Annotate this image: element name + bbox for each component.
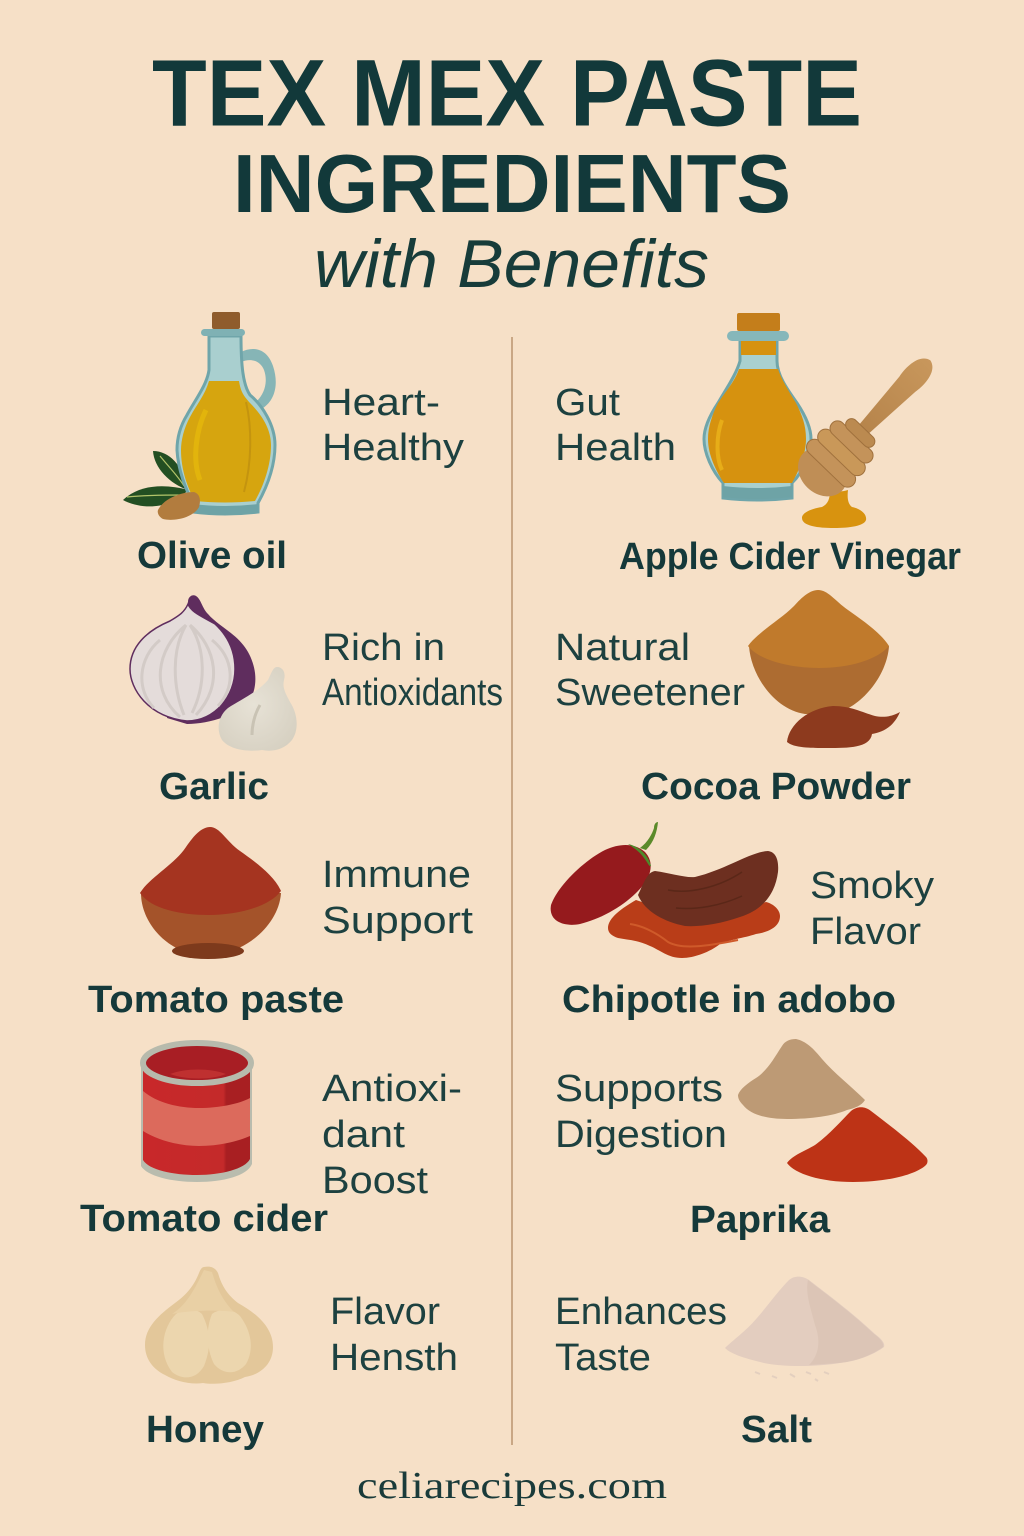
benefit: Hensth <box>330 1337 458 1379</box>
benefit <box>555 382 676 469</box>
item: chipotle in adobo <box>551 822 934 1021</box>
benefit: Taste <box>555 1337 651 1379</box>
label: Tomato cider <box>80 1198 328 1240</box>
benefit: Immune <box>322 854 471 896</box>
benefit <box>555 627 745 714</box>
label: Tomato paste <box>88 979 344 1021</box>
benefit: Digestion <box>555 1114 727 1156</box>
benefit: Natural <box>555 627 690 669</box>
icon: chipotle peppers in sauce <box>551 822 780 958</box>
icon: pale garlic bulb <box>145 1267 273 1384</box>
label: Olive oil <box>137 535 287 577</box>
item: salt <box>555 1277 884 1451</box>
label: Honey <box>146 1409 264 1451</box>
benefit: Smoky <box>810 865 934 907</box>
benefit: Flavor <box>810 911 921 953</box>
label: Garlic <box>159 766 269 808</box>
icon: bowl of cocoa and chili <box>748 590 900 748</box>
label: Apple Cider Vinegar <box>619 536 961 578</box>
benefit <box>322 1068 462 1202</box>
item: tomato paste <box>88 827 474 1021</box>
benefit <box>555 1068 727 1156</box>
benefit: Boost <box>322 1160 428 1202</box>
label: Cocoa Powder <box>641 766 911 808</box>
benefit: Sweetener <box>555 672 745 714</box>
icon: onion and garlic <box>130 595 297 751</box>
item: honey <box>145 1267 458 1451</box>
benefit <box>555 1291 727 1379</box>
center divider <box>511 337 513 1445</box>
benefit: Gut <box>555 382 620 424</box>
benefit: Healthy <box>322 427 464 469</box>
item: apple cider vinegar <box>555 313 961 578</box>
item: cocoa powder <box>555 590 911 808</box>
benefit <box>810 865 934 953</box>
title: with Benefits <box>314 226 709 302</box>
benefit: Flavor <box>330 1291 440 1333</box>
benefit <box>330 1291 458 1379</box>
icon: salt pile <box>725 1277 884 1381</box>
benefit: Support <box>322 900 474 942</box>
item: garlic <box>130 595 503 808</box>
label: Chipotle in adobo <box>562 979 896 1021</box>
label: Paprika <box>690 1199 831 1241</box>
benefit: dant <box>322 1114 405 1156</box>
benefit: Antioxidants <box>322 672 503 714</box>
icon: two spice piles <box>738 1039 928 1182</box>
benefit: Antioxi- <box>322 1068 462 1110</box>
icon: olive oil bottle <box>123 312 276 520</box>
benefit: Enhances <box>555 1291 727 1333</box>
benefit <box>322 854 474 942</box>
benefit <box>322 382 464 469</box>
benefit: Heart- <box>322 382 440 424</box>
icon: vinegar bottle and honey dipper <box>704 313 953 528</box>
label: Salt <box>741 1409 812 1451</box>
item: olive oil <box>123 312 464 577</box>
icon: bowl of red paste <box>140 827 281 959</box>
benefit: Supports <box>555 1068 723 1110</box>
benefit <box>322 627 503 714</box>
icon: tomato can <box>141 1043 252 1182</box>
title: TEX MEX PASTE <box>152 40 862 146</box>
title <box>152 40 862 302</box>
benefit: Health <box>555 427 676 469</box>
footer: website: celiarecipes.com <box>357 1465 667 1507</box>
benefit: Rich in <box>322 627 445 669</box>
item: paprika <box>555 1039 928 1241</box>
item: tomato cider <box>80 1043 462 1240</box>
title: INGREDIENTS <box>233 137 791 230</box>
